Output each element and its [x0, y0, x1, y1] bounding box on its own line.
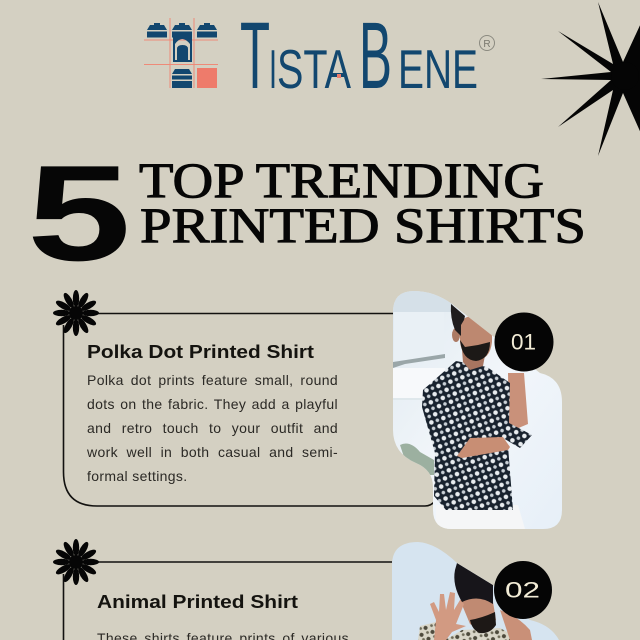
- registered mark: R: [483, 39, 491, 50]
- text block: polka dot description: and retro touch to your outfit and: [87, 420, 338, 436]
- icon: black starburst: [541, 2, 640, 156]
- card outline: [64, 314, 435, 506]
- panel: card 1 polka dot shirt: [53, 290, 562, 529]
- heading line 2: PRINTED SHIRTS: [140, 197, 586, 253]
- text block: polka dot description: dots on the fabric. They add a playful: [87, 396, 338, 412]
- big numeral 5: 5: [27, 137, 131, 289]
- logo wordmark: STA: [277, 38, 351, 100]
- logo wordmark: [240, 3, 478, 109]
- logo wordmark: T: [240, 3, 270, 109]
- icon: flower: [53, 290, 99, 336]
- number badge 02: [494, 561, 552, 619]
- number badge 01: 01: [511, 330, 536, 354]
- text block: polka dot description: work well in both casual and semi-: [87, 444, 338, 460]
- card outline: [64, 562, 392, 640]
- heading: Animal Printed Shirt: Animal Printed Shirt: [97, 592, 298, 612]
- text block: polka dot description: formal settings.: [87, 468, 188, 484]
- icon: flower: [53, 539, 99, 585]
- title: [27, 137, 586, 289]
- panel: card 2 animal print shirt: [53, 539, 559, 640]
- heading: Polka Dot Printed Shirt: Polka Dot Printed Shirt: [87, 342, 314, 362]
- registered mark: [480, 36, 494, 50]
- icon: logo palace mark: [144, 18, 218, 88]
- number badge 01: [494, 312, 554, 372]
- logo wordmark: ENE: [398, 38, 478, 100]
- logo wordmark: B: [359, 3, 392, 109]
- logo wordmark: I: [269, 38, 277, 100]
- text block: polka dot description: Polka dot prints feature small, round: [87, 372, 338, 388]
- photo: man in animal print shirt: [390, 538, 565, 640]
- heading line 1: TOP TRENDING: [139, 152, 544, 208]
- photo: man in polka dot shirt: [390, 288, 565, 533]
- text block: polka dot description: [87, 372, 338, 484]
- logo: TistaBene: [144, 3, 495, 109]
- number badge 02: 02: [505, 578, 540, 602]
